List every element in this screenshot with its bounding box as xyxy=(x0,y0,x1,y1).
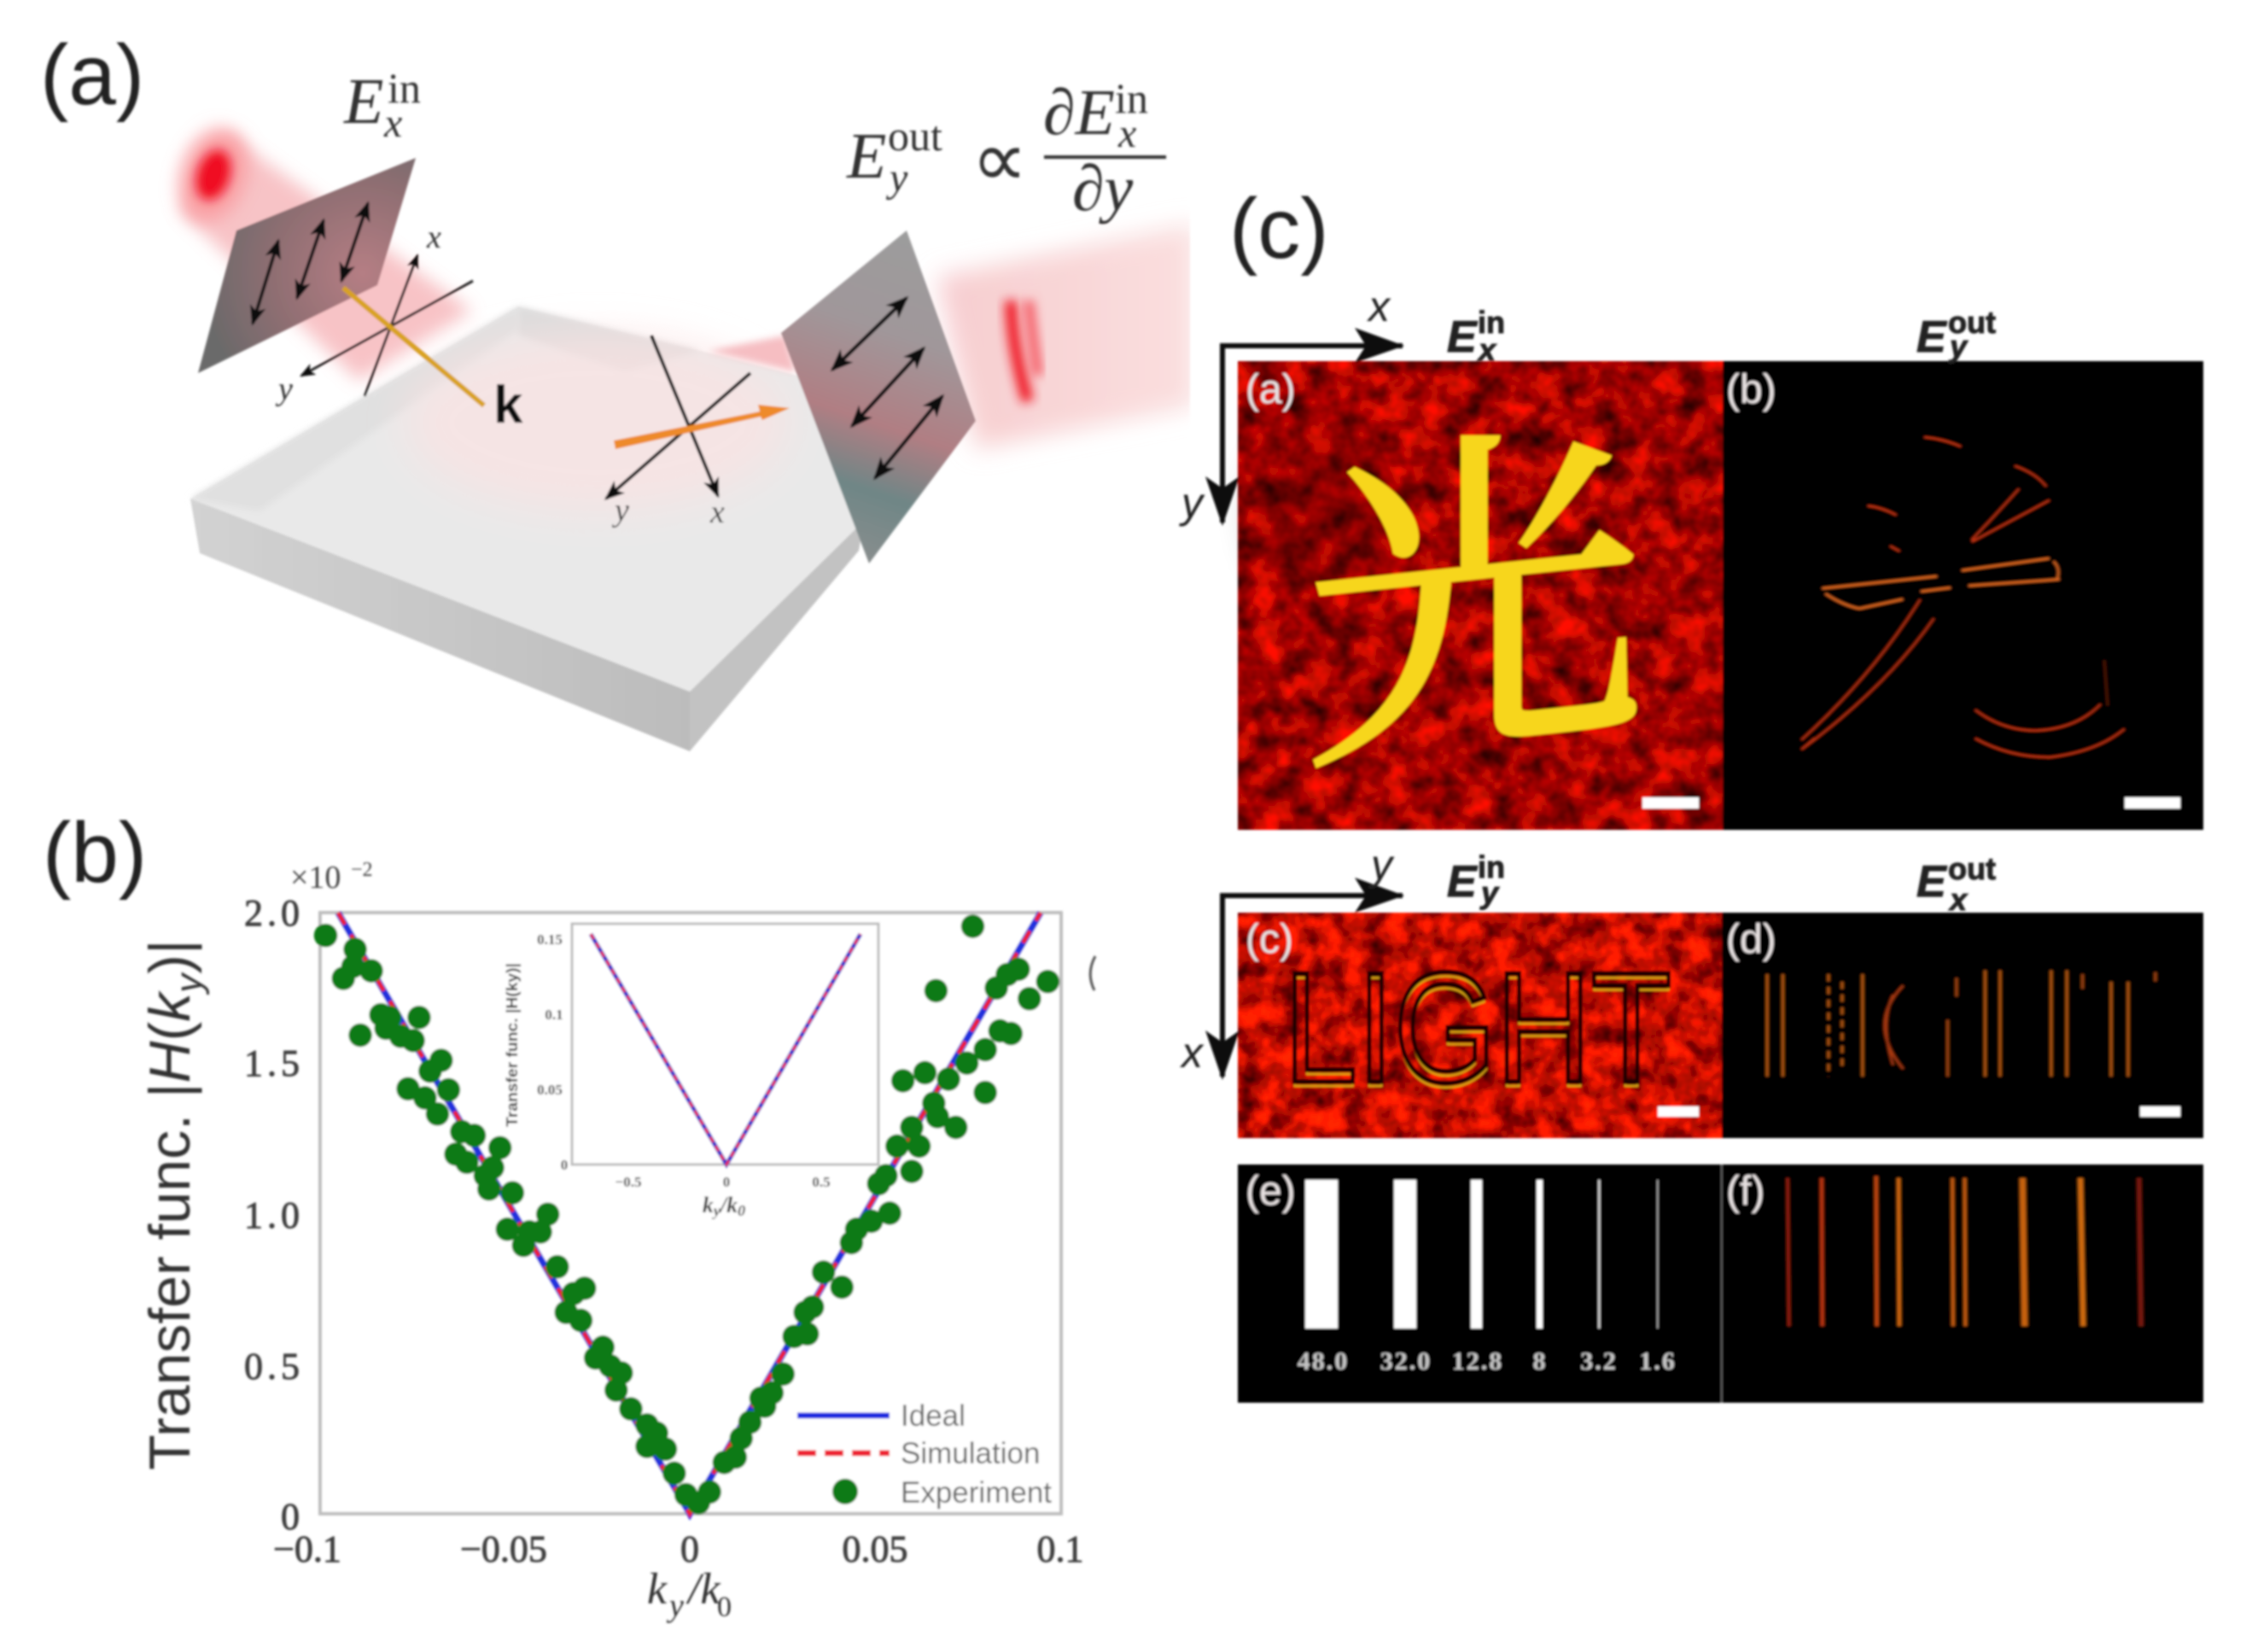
image e: resolution target input xyxy=(1238,1165,1722,1403)
dark swirl region xyxy=(1255,427,1383,598)
header: E_y out xyxy=(1916,305,1996,364)
formula: E_x in xyxy=(343,64,421,146)
header: E_y out: out xyxy=(1948,305,1996,340)
inset chart: −0.5 xyxy=(615,1174,641,1190)
header: E_x in: E xyxy=(1447,312,1478,362)
sub-label: (b) xyxy=(1726,367,1776,412)
y tick labels xyxy=(244,892,304,1538)
inset chart: 0.05 xyxy=(537,1082,563,1098)
image b: output edges of character xyxy=(1723,361,2203,830)
x tick labels xyxy=(273,1528,1084,1570)
header: E_y out: E xyxy=(1916,312,1947,362)
experiment data points xyxy=(314,914,1059,1515)
bar width labels: 3.2 xyxy=(1580,1347,1618,1375)
multiplier xyxy=(290,859,373,896)
input wavevector k arrow xyxy=(343,288,484,406)
formula: E_y out proportional to dE/dy: ∂y xyxy=(1072,153,1134,225)
heading: (a): (a) xyxy=(40,27,144,123)
panel: (b) transfer function chart xyxy=(43,805,1095,1624)
bar width labels: 32.0 xyxy=(1380,1347,1432,1375)
header: E_y in: E xyxy=(1447,857,1478,907)
header: E_x out: E xyxy=(1916,857,1947,907)
axes y-x for second row xyxy=(1180,841,1404,1080)
image f: resolution target output xyxy=(1721,1165,2203,1403)
y axis title: Transfer func. |H(k xyxy=(137,993,202,1470)
character: 光 xyxy=(1304,400,1646,814)
inset chart: 0 xyxy=(738,1202,745,1219)
inset chart: /k xyxy=(719,1193,738,1217)
inset chart: 0 xyxy=(561,1157,568,1173)
output analyser plate xyxy=(781,231,976,563)
formula: E_x in: in xyxy=(388,64,421,112)
formula: E_y out proportional to dE/dy: ∝ xyxy=(971,116,1028,203)
sub-label: (a) xyxy=(1246,367,1296,412)
x axis title xyxy=(647,1565,732,1624)
stray bracket fragment xyxy=(1090,956,1095,990)
bar width labels: 12.8 xyxy=(1452,1347,1503,1375)
legend xyxy=(797,1399,1052,1509)
multiplier: −2 xyxy=(351,859,373,881)
formula: E_y out proportional to dE/dy: y xyxy=(885,155,908,201)
output axes xyxy=(606,336,750,499)
y axis title: y xyxy=(168,972,210,995)
character edges xyxy=(1801,437,2125,757)
y tick labels: 1.5 xyxy=(244,1042,304,1084)
x tick labels: 0 xyxy=(680,1528,699,1570)
image d: output text edges xyxy=(1722,913,2203,1138)
axes x-y for first row: y xyxy=(1179,479,1205,527)
header: E_x out: x xyxy=(1948,882,1969,917)
output beam xyxy=(937,224,1195,449)
formula: E_y out proportional to dE/dy: in xyxy=(1115,74,1148,122)
x axis title: k xyxy=(647,1565,668,1614)
ideal line xyxy=(338,913,1041,1514)
formula: E_y out proportional to dE/dy: ∂E xyxy=(1043,77,1115,149)
sub-label: (f) xyxy=(1726,1169,1765,1214)
label: x: x xyxy=(426,219,441,255)
legend: Ideal xyxy=(901,1399,965,1433)
legend: Experiment xyxy=(901,1476,1052,1509)
input axes xyxy=(301,255,473,396)
bar width labels: 48.0 xyxy=(1298,1347,1349,1375)
formula: E_x in: E xyxy=(343,66,383,137)
input polarizer plate xyxy=(198,158,416,373)
scale bar xyxy=(2140,1106,2180,1117)
y tick labels: 0 xyxy=(281,1496,304,1538)
word: dark edge: LIGHT xyxy=(1284,939,1671,1115)
bar width labels: 8 xyxy=(1533,1347,1547,1375)
header: E_x in xyxy=(1447,305,1505,367)
formula: E_y out proportional to dE/dy: out xyxy=(888,112,942,160)
inset chart: Transfer func. |H(ky)| xyxy=(504,963,521,1127)
light beam across slab xyxy=(405,333,796,512)
plot frame xyxy=(320,913,1061,1514)
simulation line xyxy=(338,913,1041,1514)
heading: (c): (c) xyxy=(1229,181,1329,277)
output double-lobe spot xyxy=(1011,301,1038,401)
glass slab xyxy=(190,306,864,751)
header: E_y out: y xyxy=(1948,329,1969,364)
edge stripes xyxy=(1788,1176,2141,1327)
incident gaussian spot xyxy=(168,120,259,231)
sub-label: (d) xyxy=(1726,917,1776,962)
header: E_x in: x xyxy=(1477,332,1497,367)
x tick labels: −0.1 xyxy=(273,1528,341,1570)
bar width labels xyxy=(1298,1347,1677,1375)
inset chart: 0 xyxy=(723,1174,730,1190)
y axis title: )| xyxy=(137,939,202,974)
header: E_y in xyxy=(1447,849,1505,910)
y tick labels: 0.5 xyxy=(244,1346,304,1387)
x tick labels: 0.05 xyxy=(842,1528,908,1570)
image c: input text xyxy=(1238,913,1722,1138)
heading: (b): (b) xyxy=(43,805,147,901)
legend: Simulation xyxy=(901,1437,1040,1470)
header: E_y in: in xyxy=(1478,849,1505,884)
label: y: y xyxy=(611,493,629,528)
x tick labels: 0.1 xyxy=(1036,1528,1084,1570)
axes x-y for first row xyxy=(1179,283,1404,527)
axes y-x for second row: y xyxy=(1368,841,1395,889)
scale bar xyxy=(1642,797,1699,808)
inset chart: y xyxy=(712,1202,721,1219)
header: E_y in: y xyxy=(1479,875,1500,910)
x axis title: 0 xyxy=(717,1591,732,1623)
polarization arrows xyxy=(832,298,942,478)
inset chart xyxy=(504,924,878,1219)
inset chart: k xyxy=(703,1193,714,1217)
sub-label: (e) xyxy=(1246,1169,1296,1214)
mask keeping the beam edge straight xyxy=(1190,171,1233,452)
formula: E_x in: x xyxy=(383,101,402,146)
x tick labels: −0.05 xyxy=(460,1528,547,1570)
header: E_x in: in xyxy=(1478,305,1505,340)
axes y-x for second row: x xyxy=(1180,1029,1205,1077)
multiplier: ×10 xyxy=(290,860,341,896)
label: x: x xyxy=(709,494,725,530)
inset chart: 0.15 xyxy=(537,931,563,948)
inset chart: 0.5 xyxy=(812,1174,831,1190)
y tick labels: 2.0 xyxy=(244,892,304,934)
word: shadow edge: LIGHT xyxy=(1284,943,1671,1119)
panel: (a) metasurface schematic xyxy=(40,27,1233,751)
axes x-y for first row: x xyxy=(1367,283,1391,330)
y tick labels: 1.0 xyxy=(244,1194,304,1236)
image a: input character xyxy=(1238,361,1723,830)
formula: E_y out proportional to dE/dy xyxy=(846,74,1166,225)
scale bar xyxy=(1658,1106,1699,1117)
white bars xyxy=(1305,1180,1658,1328)
inset chart: 0.1 xyxy=(545,1007,563,1023)
x axis title: /k xyxy=(685,1565,720,1614)
bar width labels: 1.6 xyxy=(1639,1347,1677,1375)
formula: E_y out proportional to dE/dy: x xyxy=(1117,111,1136,156)
formula: E_y out proportional to dE/dy: E xyxy=(846,120,886,192)
scale bar xyxy=(2125,797,2180,808)
label: y: y xyxy=(275,371,293,407)
sub-label: (c) xyxy=(1246,917,1293,962)
x axis title: y xyxy=(666,1588,684,1624)
panel: (c) edge detection images xyxy=(1179,181,2203,1403)
header: E_x out: out xyxy=(1948,851,1996,886)
polarization arrows xyxy=(253,203,368,324)
header: E_x out xyxy=(1916,851,1996,917)
incident beam xyxy=(179,135,472,381)
label: k: k xyxy=(493,376,523,435)
edge stripes xyxy=(1767,970,2156,1077)
output wavevector arrow xyxy=(614,405,790,449)
